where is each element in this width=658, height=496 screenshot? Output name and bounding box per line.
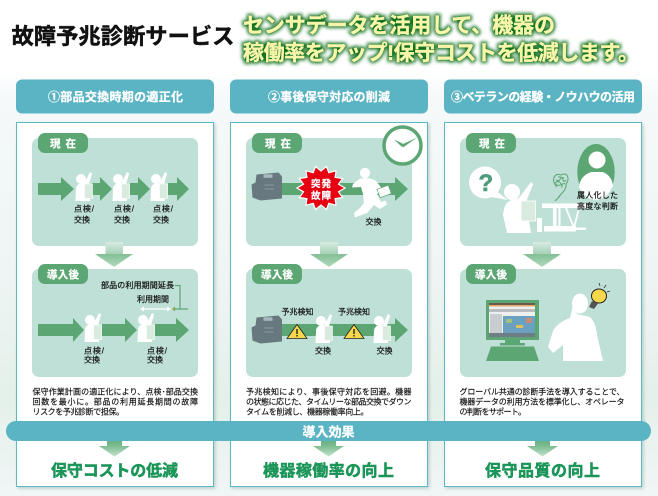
band: introduction effects: 導入効果: [302, 424, 354, 440]
headline: [243, 14, 639, 65]
panel 1 after introduction: 点検/: [147, 346, 168, 356]
heading tab 3: ③ベテランの経験・ノウハウの活用: [451, 89, 635, 104]
panel 2 after introduction: 交換: [315, 346, 331, 356]
panel 1 after introduction: 導入後: [47, 268, 80, 281]
panel 1 description: [32, 386, 198, 416]
panel 2 description: [246, 386, 412, 416]
panel 1 current state: 点検/: [114, 204, 135, 214]
heading tab 2: [230, 80, 428, 114]
panel 2 description: の状態に応じた、タイムリーな部品交換でダウン: [246, 396, 412, 406]
panel 2 after introduction: [246, 264, 412, 377]
panel 1 current state: 点検/: [74, 204, 95, 214]
panel 1 after introduction: [32, 264, 198, 377]
icon: equipment and plant: [537, 174, 586, 232]
panel 1 after introduction: 部品の利用期間延長: [101, 280, 174, 290]
panel 1 current state: 交換: [74, 214, 90, 224]
icon: failure burst: [297, 166, 345, 210]
title: 故障予兆診断サービス: [12, 24, 234, 49]
panel 1: [16, 122, 214, 486]
panel 2 result: 機器稼働率の向上: [263, 461, 394, 480]
panel 1 description: リスクを予兆診断で担保。: [32, 406, 124, 416]
panel 1 result: 保守コストの低減: [51, 462, 178, 480]
icon: engineer with clipboard: [503, 182, 536, 233]
panel 2 current state: 交換: [366, 216, 382, 226]
panel 2 current state: [246, 127, 421, 246]
panel 3: [444, 122, 642, 486]
headline: センサデータを活用して、機器の: [243, 14, 555, 38]
panel 1 current state: 現 在: [50, 137, 76, 150]
panel 3 after introduction: 導入後: [475, 268, 508, 281]
panel 3 result: 保守品質の向上: [485, 462, 600, 480]
panel 2 after introduction: 導入後: [261, 268, 294, 281]
band: introduction effects: [6, 421, 651, 441]
panel 3 description: 機器データの利用方法を標準化し、オペレータ: [460, 396, 624, 406]
panel 2 current state: 現 在: [265, 137, 291, 150]
headline: 稼働率をアップ!保守コストを低減します。: [243, 41, 639, 65]
panel 3 current state: 属人化した: [577, 191, 618, 200]
panel 1 after introduction: 交換: [147, 354, 163, 364]
panel 3 down arrow: [523, 242, 561, 267]
icon: thinking person: [548, 294, 603, 361]
panel 1 after introduction: 交換: [84, 354, 100, 364]
panel 2 after introduction: 予兆検知: [338, 306, 370, 316]
heading tab 2: ②事後保守対応の削減: [268, 89, 390, 104]
icon: computer monitor: [486, 300, 539, 361]
panel 1 current state: 交換: [153, 214, 169, 224]
icon: clock: [384, 127, 421, 164]
headline: センサデータを活用して、機器の: [243, 14, 555, 38]
result arrow 1: [99, 436, 130, 456]
panel 1 current state: 交換: [114, 214, 130, 224]
icon: running person: [352, 168, 391, 218]
heading tab 1: ①部品交換時期の適正化: [48, 89, 183, 104]
icon: warning triangles: [287, 324, 364, 338]
panel 1 description: 保守作業計画の適正化により、点検･部品交換: [32, 386, 198, 396]
result arrow 2: [313, 436, 344, 456]
panel 2 description: タイムを削減し、機器稼働率向上。: [246, 406, 368, 416]
panel 2: [230, 122, 428, 486]
panel 1 description: 回数を最小に。部品の利用延長期間の故障: [32, 396, 198, 406]
icon: expert silhouette: [577, 144, 615, 200]
icon: light bulb: [589, 283, 610, 309]
heading tab 1: [16, 80, 214, 114]
panel 3 current state: [460, 133, 626, 246]
panel 3 description: [460, 386, 624, 416]
icon: failure burst: 故障: [311, 190, 331, 202]
heading tab 3: [444, 80, 642, 114]
panel 1 current state: 点検/: [153, 204, 174, 214]
panel 2 description: 予兆検知により、事後保守対応を回避。機器: [246, 386, 412, 396]
panel 3 after introduction: [460, 264, 626, 377]
result arrow 3: [527, 436, 558, 456]
panel 1 current state: [32, 133, 198, 246]
icon: question bubble: [469, 166, 508, 200]
headline: 稼働率をアップ!保守コストを低減します。: [243, 41, 639, 65]
panel 2 after introduction: 交換: [376, 346, 392, 356]
panel 3 current state: 高度な判断: [577, 201, 618, 211]
panel 3 description: グローバル共通の診断手法を導入することで、: [460, 386, 624, 396]
panel 1 after introduction: 利用期間: [137, 294, 169, 304]
panel 2 after introduction: 予兆検知: [282, 306, 314, 316]
panel 3 current state: 現 在: [479, 137, 505, 150]
icon: failure burst: 突発: [311, 178, 331, 190]
panel 2 down arrow: [310, 242, 348, 267]
panel 1 down arrow: [95, 242, 133, 267]
panel 1 after introduction: 点検/: [84, 346, 105, 356]
icon: question bubble: ?: [478, 170, 493, 197]
panel 3 description: の判断をサポート。: [460, 406, 526, 416]
